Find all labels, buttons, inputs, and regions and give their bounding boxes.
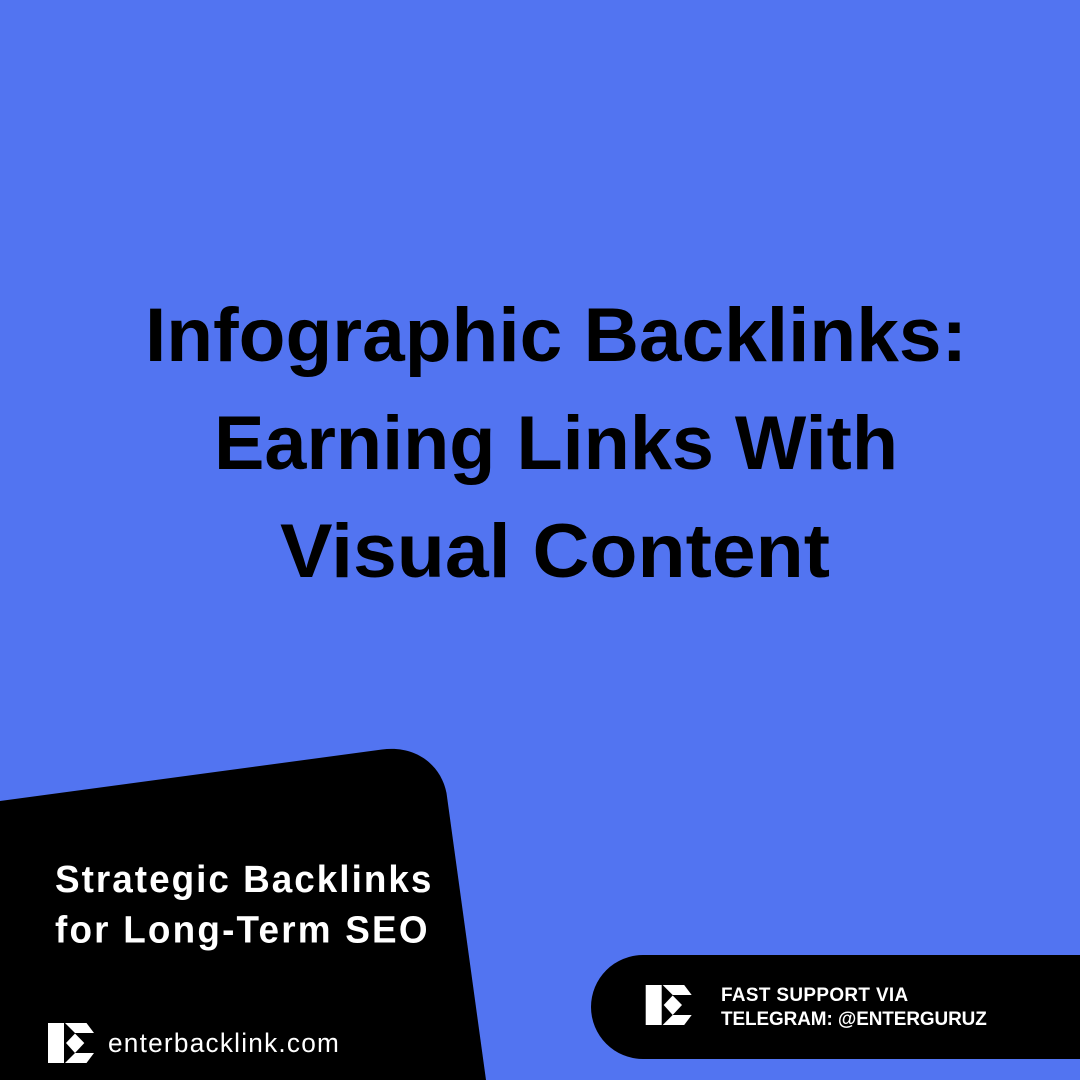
panel: tagline and website	[0, 749, 486, 1080]
title: Infographic Backlinks:	[145, 293, 967, 378]
tagline	[55, 857, 431, 951]
panel: support	[591, 955, 1080, 1059]
support text: TELEGRAM: @ENTERGURUZ	[721, 1009, 987, 1030]
tagline: for Long-Term SEO	[55, 908, 427, 951]
title: Earning Links With	[214, 401, 898, 486]
title	[145, 293, 967, 594]
title: Visual Content	[280, 509, 830, 594]
website address: enterbacklink.com	[108, 1028, 339, 1058]
icon: brand logo	[48, 1023, 94, 1063]
support text	[721, 985, 987, 1030]
icon: brand logo	[646, 985, 692, 1025]
tagline: Strategic Backlinks	[55, 857, 431, 900]
support text: FAST SUPPORT VIA	[721, 985, 908, 1006]
